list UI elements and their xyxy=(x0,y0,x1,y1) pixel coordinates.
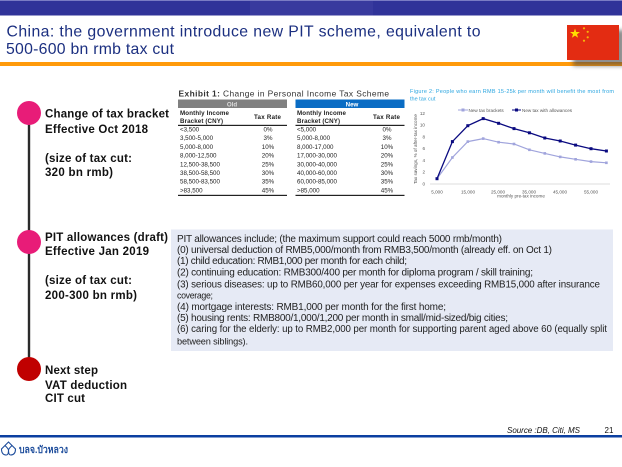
logo: Bualuang xyxy=(2,442,68,456)
text: change of tax bracket: Change of tax bracket xyxy=(45,108,169,120)
source note: Source :DB, Citi, MS xyxy=(507,426,581,435)
footer rule xyxy=(0,435,622,438)
marker: next step xyxy=(17,357,41,381)
allowances text: (0) universal deduction of RMB5,000/month from RMB3,500/month (already eff. on Oct 1) xyxy=(177,245,552,256)
timeline xyxy=(17,101,41,381)
old scheme rows: >83,500 xyxy=(180,187,203,194)
old scheme rows: 3,500-5,000 xyxy=(180,135,214,142)
text: next step: VAT deduction xyxy=(45,380,127,392)
old scheme rows: 5,000-8,000 xyxy=(180,144,214,151)
allowances text: (4) mortgage interests: RMB1,000 per month for the first home; xyxy=(177,302,446,313)
new scheme rows: 8,000-17,000 xyxy=(297,144,334,151)
column headings: Tax Rate xyxy=(254,114,282,121)
title: China: the government introduce new PIT scheme, equivalent to xyxy=(6,24,481,40)
chart x axis: 55,000 xyxy=(584,190,598,194)
new scheme rows: 40,000-60,000 xyxy=(297,170,337,177)
text: next step: Next step xyxy=(45,365,98,377)
table: change in personal income tax scheme xyxy=(178,88,404,196)
text: PIT allowances: Effective Jan 2019 xyxy=(45,246,149,258)
old scheme rows: 0% xyxy=(264,126,273,134)
chart heading xyxy=(410,89,614,102)
allowances text: (2) continuing education: RMB300/400 per month for diploma program / skill training; xyxy=(177,268,533,278)
old scheme rows: 20% xyxy=(262,153,275,160)
allowances text: (1) child education: RMB1,000 per month for each child; xyxy=(177,256,407,267)
old scheme header xyxy=(178,100,287,108)
old scheme rows: 30% xyxy=(262,170,275,177)
chart x axis xyxy=(430,184,610,198)
old scheme header: Old xyxy=(227,101,237,108)
text: next step: CIT cut xyxy=(45,393,85,405)
column headings xyxy=(180,110,401,125)
text: PIT allowances: 200-300 bn rmb) xyxy=(45,290,137,302)
chart x axis: 5,000 xyxy=(431,190,443,194)
text: PIT allowances: PIT allowances (draft) xyxy=(45,232,168,244)
old scheme rows: 45% xyxy=(262,187,275,194)
allowances text: (6) caring for the elderly: up to RMB2,000 per month for supporting parent aged above 60 (equally split xyxy=(177,324,607,335)
chart y axis: 2 xyxy=(422,170,425,175)
new scheme rows: 3% xyxy=(383,135,392,142)
column headings: Monthly Income xyxy=(180,110,230,117)
allowances text xyxy=(177,234,607,346)
chart y axis xyxy=(413,111,425,186)
new scheme rows: 10% xyxy=(381,144,394,151)
chart legend xyxy=(458,108,573,113)
marker: change of tax bracket xyxy=(17,101,41,125)
text: next step xyxy=(45,365,127,405)
page number: 21 xyxy=(605,426,614,435)
new scheme header xyxy=(296,100,404,108)
old scheme rows: <3,500 xyxy=(180,126,200,134)
panel: PIT allowances details xyxy=(171,230,613,351)
chart heading: Figure 2: People who earn RMB 15-25k per month will benefit the most from xyxy=(410,89,614,95)
column headings: Bracket (CNY) xyxy=(180,118,223,125)
allowances text: coverage; xyxy=(177,290,213,300)
new scheme rows: 30,000-40,000 xyxy=(297,161,337,168)
chart y axis: 0 xyxy=(422,182,425,186)
chart x axis: 15,000 xyxy=(461,190,475,194)
chart heading: the tax cut xyxy=(410,96,436,102)
text: change of tax bracket xyxy=(45,108,169,179)
new scheme rows: <5,000 xyxy=(297,126,317,134)
old scheme rows xyxy=(180,126,275,194)
chart y axis: 8 xyxy=(422,134,425,139)
new scheme rows: 17,000-30,000 xyxy=(297,153,337,160)
allowances text: PIT allowances include; (the maximum support could reach 5000 rmb/month) xyxy=(177,234,502,245)
new scheme rows: 30% xyxy=(381,170,394,177)
title xyxy=(6,24,481,58)
new scheme rows: 0% xyxy=(383,126,392,134)
old scheme rows: 35% xyxy=(262,179,275,186)
marker: PIT allowances xyxy=(17,230,41,254)
old scheme rows: 25% xyxy=(262,161,275,168)
logo wordmark: บลจ.บัวหลวง xyxy=(19,444,68,456)
chart legend: New tax brackets xyxy=(468,108,504,113)
text: change of tax bracket: 320 bn rmb) xyxy=(45,167,113,179)
new scheme rows: >85,000 xyxy=(297,187,320,194)
chart y axis: 12 xyxy=(420,111,425,116)
new scheme header: New xyxy=(346,101,359,108)
new scheme rows: 35% xyxy=(381,179,394,186)
new scheme rows: 20% xyxy=(381,153,394,160)
text: PIT allowances: (size of tax cut: xyxy=(45,275,132,287)
new scheme rows xyxy=(297,126,394,194)
allowances text: (5) housing rents: RMB800/1,000/1,200 per month in small/mid-sized/big cities; xyxy=(177,313,508,324)
new scheme rows: 5,000-8,000 xyxy=(297,135,331,142)
old scheme rows: 8,000-12,500 xyxy=(180,153,217,160)
chart x axis: 25,000 xyxy=(491,190,505,194)
timeline connector line xyxy=(28,113,30,369)
text: PIT allowances xyxy=(45,232,168,302)
chart y axis: 4 xyxy=(422,158,425,163)
chart y axis: 10 xyxy=(420,123,425,128)
old scheme rows: 10% xyxy=(262,144,275,151)
old scheme rows: 3% xyxy=(264,135,273,142)
line: new tax with allowances xyxy=(436,117,608,180)
chart y axis: 6 xyxy=(422,146,425,151)
chart x axis: 35,000 xyxy=(522,190,536,194)
table heading: Exhibit 1: Change in Personal Income Tax Scheme xyxy=(178,88,389,98)
chart x axis: monthly pre-tax income xyxy=(497,194,545,198)
new scheme rows: 45% xyxy=(381,187,394,194)
new scheme rows: 25% xyxy=(381,161,394,168)
top banner xyxy=(0,0,622,16)
icon: China flag xyxy=(567,25,622,66)
column headings: Bracket (CNY) xyxy=(297,118,340,125)
old scheme rows: 38,500-58,500 xyxy=(180,170,220,177)
text: change of tax bracket: Effective Oct 2018 xyxy=(45,124,149,136)
icon: lotus xyxy=(2,442,16,455)
orange title rule xyxy=(0,62,622,66)
chart y axis: Tax savings, % of after-tax income xyxy=(413,114,418,184)
allowances text: between siblings). xyxy=(177,336,248,346)
new scheme rows: 60,000-85,000 xyxy=(297,179,337,186)
text: change of tax bracket: (size of tax cut: xyxy=(45,153,132,165)
chart: tax savings by monthly pre-tax income xyxy=(410,89,614,198)
line: new tax brackets xyxy=(437,137,608,179)
old scheme rows: 12,500-38,500 xyxy=(180,161,220,168)
old scheme rows: 58,500-83,500 xyxy=(180,179,220,186)
column headings: Tax Rate xyxy=(373,114,401,121)
column headings: Monthly Income xyxy=(297,110,347,117)
chart x axis: 45,000 xyxy=(553,190,567,194)
title: 500-600 bn rmb tax cut xyxy=(6,41,175,58)
chart legend: New tax with allowances xyxy=(522,108,573,113)
allowances text: (3) serious diseases: up to RMB60,000 per year for expenses exceeding RMB15,000 after insurance xyxy=(177,280,601,290)
